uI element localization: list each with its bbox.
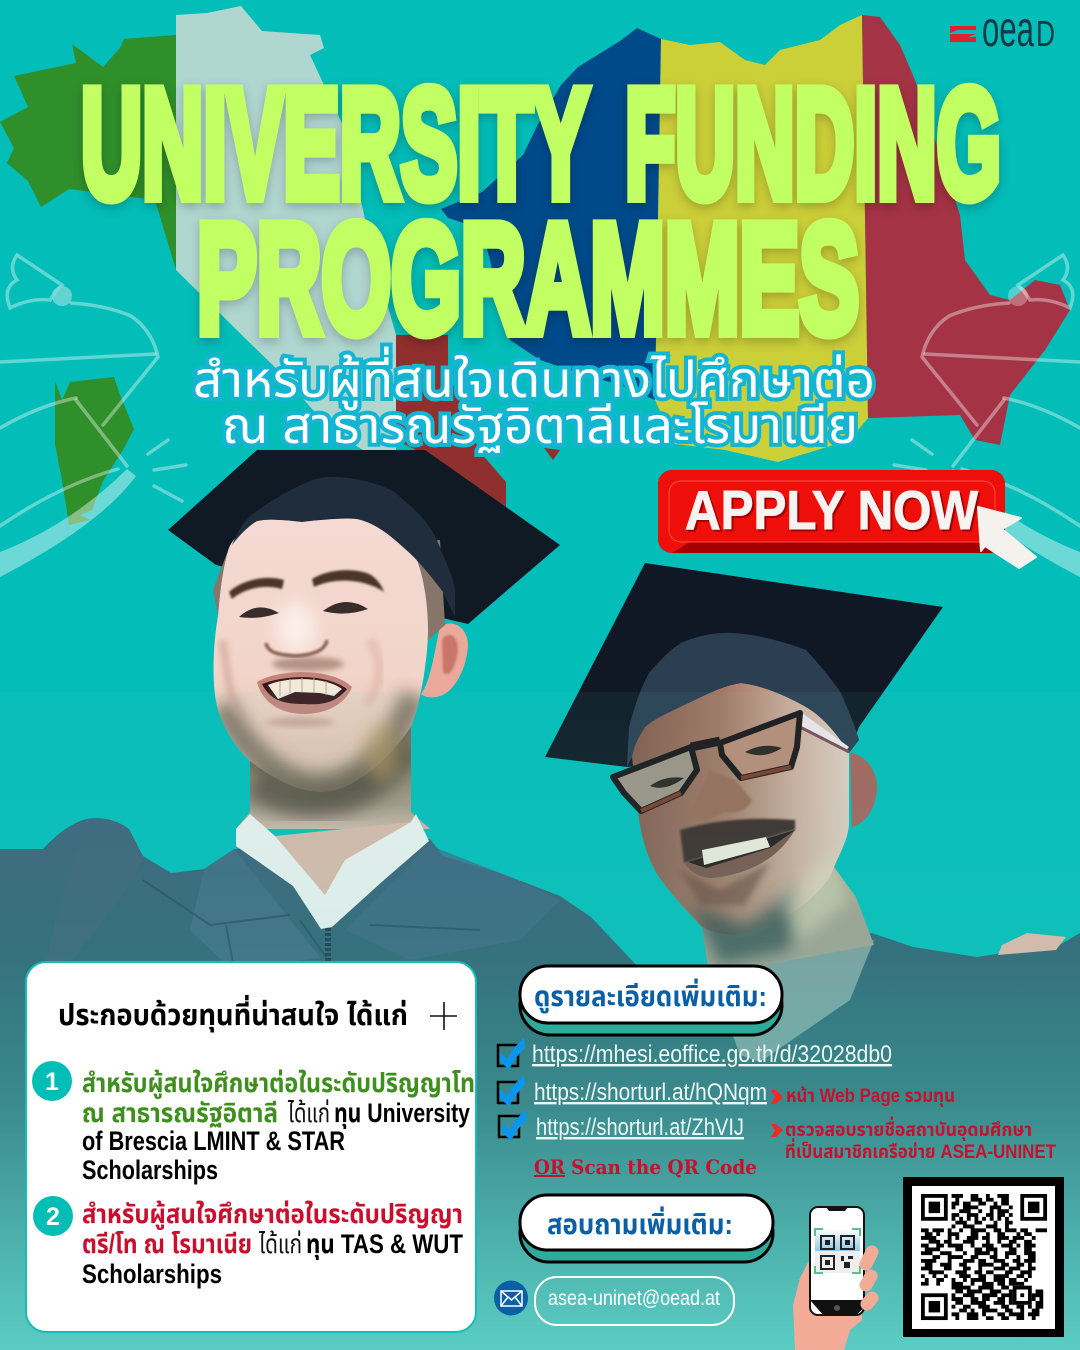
item 2 text: ตรี/โท ณ โรมาเนีย <box>82 1229 252 1259</box>
link 2: https://shorturl.at/hQNqm <box>534 1079 767 1106</box>
item 2 text: Scholarships <box>82 1259 222 1289</box>
pill heading: contact <box>520 1195 773 1262</box>
item 1 text: ทุน University <box>334 1098 470 1129</box>
red note: web page: หน้า Web Page รวมทุน <box>786 1085 955 1107</box>
item 1 text: of Brescia LMINT & STAR <box>82 1126 345 1156</box>
red note: member institutions: ตรวจสอบรายชื่อสถาบันอุดมศึกษา <box>785 1116 1032 1141</box>
number badge 2: 2 <box>46 1203 60 1231</box>
number badge 1 <box>32 1061 72 1101</box>
email pill <box>535 1277 734 1325</box>
item 1 text <box>82 1068 475 1185</box>
decorative graduation cap outline, right <box>894 255 1080 577</box>
item 2 text: ทุน TAS & WUT <box>306 1229 463 1260</box>
icon: cursor arrow <box>978 507 1036 568</box>
QR code <box>903 1177 1064 1337</box>
logo: OeAD: oea <box>982 1 1034 57</box>
icon: plus <box>430 1002 457 1030</box>
checkbox 1 <box>498 1038 525 1070</box>
item 1 text: สำหรับผู้สนใจศึกษาต่อในระดับปริญญาโท <box>82 1068 475 1099</box>
checkbox 2 <box>498 1075 525 1107</box>
decorative graduation cap outline, left <box>0 255 186 577</box>
item 1 text: ได้แก่ <box>287 1098 330 1128</box>
button: apply now <box>658 470 1005 553</box>
pill heading: more details <box>520 966 782 1035</box>
item 2 text <box>82 1199 463 1289</box>
subtitle: ณ สาธารณรัฐอิตาลีและโรมาเนีย <box>222 398 858 454</box>
item 2 text: ได้แก่ <box>258 1229 302 1259</box>
email pill: asea-uninet@oead.at <box>548 1287 720 1310</box>
button: apply now: APPLY NOW <box>685 479 978 541</box>
pill heading: contact: สอบถามเพิ่มเติม: <box>547 1206 733 1240</box>
item 1 text: ณ สาธารณรัฐอิตาลี <box>82 1098 278 1128</box>
item 2 text: สำหรับผู้สนใจศึกษาต่อในระดับปริญญา <box>82 1199 463 1230</box>
title <box>81 57 1001 365</box>
panel heading: ประกอบด้วยทุนที่น่าสนใจ ได้แก่ <box>58 994 408 1032</box>
logo: OeAD <box>950 1 1055 57</box>
map: Romania in flag colours <box>441 15 1070 462</box>
gradient overlay fading the photo into teal <box>0 692 1080 1350</box>
scan prompt: OR <box>534 1155 565 1179</box>
pill heading: more details: ดูรายละเอียดเพิ่มเติม: <box>534 978 767 1014</box>
red note: member institutions <box>771 1116 1056 1163</box>
icon: email <box>494 1280 528 1316</box>
panel: scholarships <box>26 962 476 1332</box>
graduate photo: right man <box>545 563 943 975</box>
link 1: https://mhesi.eoffice.go.th/d/32028db0 <box>532 1041 892 1068</box>
checkbox 3 <box>499 1110 527 1141</box>
number badge 1: 1 <box>45 1068 59 1096</box>
graduate photo: left man <box>168 450 560 929</box>
item 1 text: Scholarships <box>82 1155 218 1185</box>
scan prompt: Scan the QR Code <box>571 1155 757 1179</box>
icon: hand holding phone scanning QR <box>793 1207 872 1350</box>
number badge 2 <box>33 1196 73 1236</box>
subtitle: สำหรับผู้ที่สนใจเดินทางไปศึกษาต่อ <box>193 346 875 410</box>
map: Italy in flag colours <box>0 6 560 525</box>
title: UNIVERSITY <box>81 57 589 230</box>
logo: OeAD: D <box>1036 13 1055 54</box>
graduate photo: gowns <box>0 818 1080 1350</box>
link 3: https://shorturl.at/ZhVIJ <box>536 1114 744 1141</box>
subtitle <box>193 346 875 454</box>
